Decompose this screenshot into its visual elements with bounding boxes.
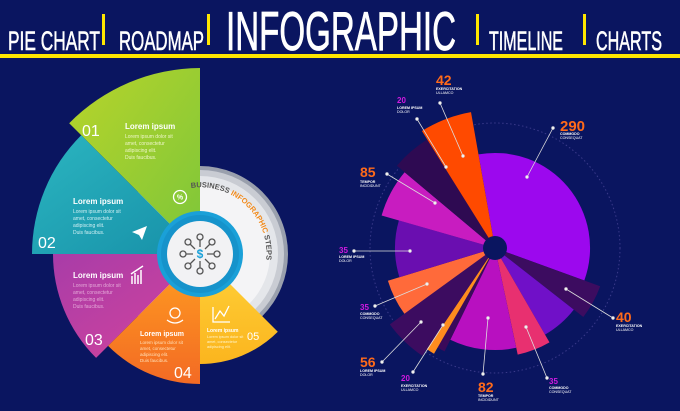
data labels: ULLAMCO	[436, 91, 454, 95]
segment 05 yellow: Lorem ipsum dolor sit	[207, 335, 244, 339]
segment 03 magenta: Lorem ipsum dolor sit	[73, 283, 121, 289]
header label: roadmap: ROADMAP	[119, 26, 204, 56]
data labels	[339, 72, 643, 402]
segment 01 green: Lorem ipsum	[125, 122, 175, 131]
segment 02 teal: 02	[38, 235, 56, 252]
segment 01 green: %	[177, 194, 184, 202]
data labels: 20	[401, 374, 410, 383]
segment 04 orange: amet, consectetur	[140, 346, 176, 351]
segment 01 green: adipiscing elit.	[125, 148, 156, 154]
segment 01 green: 01	[82, 123, 100, 140]
segment 02 teal: Lorem ipsum	[73, 197, 123, 206]
segment 03 magenta: Duis faucibus.	[73, 304, 104, 310]
data labels: COMMODO	[360, 312, 380, 316]
data labels: INCIDIDUNT	[478, 398, 500, 402]
data labels: 56	[360, 354, 376, 370]
data labels: 85	[360, 164, 376, 180]
data labels: 35	[339, 246, 348, 255]
data labels: LOREM IPSUM	[360, 369, 385, 373]
data labels: 42	[436, 72, 452, 88]
data labels: LOREM IPSUM	[339, 255, 364, 259]
left pie chart: business infographic steps	[32, 68, 288, 384]
data labels: 82	[478, 379, 494, 395]
data labels: DOLOR	[397, 110, 410, 114]
segment 04 orange: 04	[174, 365, 192, 382]
segment 05 yellow	[200, 254, 278, 364]
segment 05 yellow: adipiscing elit.	[207, 345, 231, 349]
segment 04 orange: Lorem ipsum	[140, 331, 184, 338]
data labels: COMMODO	[549, 386, 569, 390]
segment 04 orange	[108, 254, 200, 384]
segment 02 teal: amet, consectetur	[73, 216, 113, 222]
data labels: EXERCITATION	[401, 384, 428, 388]
center hub icon	[157, 211, 243, 297]
data labels: 35	[549, 377, 558, 386]
segment 01 green: Lorem ipsum dolor sit	[125, 134, 173, 140]
title: INFOGRAPHIC	[226, 0, 456, 62]
segment 05 yellow: 05	[247, 331, 259, 343]
data labels: CONSEQUAT	[560, 136, 583, 140]
segment 02 teal	[32, 135, 200, 254]
data labels: TEMPOR	[478, 394, 494, 398]
right radial chart	[370, 112, 620, 373]
data labels: 290	[560, 118, 585, 135]
header label: timeline: TIMELINE	[489, 26, 563, 56]
data labels: CONSEQUAT	[360, 316, 383, 320]
data labels: EXERCITATION	[616, 324, 643, 328]
gray rings	[112, 166, 288, 342]
segment 02 teal: adipiscing elit.	[73, 223, 104, 229]
segment 02 teal: Duis faucibus.	[73, 230, 104, 236]
leader lines	[353, 102, 614, 379]
segment 02 teal: Lorem ipsum dolor sit	[73, 209, 121, 215]
segment 03 magenta	[53, 254, 200, 358]
segment 04 orange: adipiscing elit.	[140, 352, 168, 357]
segment 03 magenta: Lorem ipsum	[73, 271, 123, 280]
wedges	[382, 112, 600, 356]
data labels: ULLAMCO	[616, 328, 634, 332]
data labels: CONSEQUAT	[549, 390, 572, 394]
segment 05 yellow: Lorem ipsum	[207, 328, 239, 334]
data labels: 20	[397, 96, 406, 105]
segment 03 magenta: 03	[85, 332, 103, 349]
data labels: TEMPOR	[360, 180, 376, 184]
data labels: COMMODO	[560, 132, 580, 136]
data labels: DOLOR	[360, 373, 373, 377]
data labels: EXERCITATION	[436, 87, 463, 91]
data labels: DOLOR	[339, 259, 352, 263]
data labels: 35	[360, 303, 369, 312]
segment 01 green	[69, 68, 200, 254]
header	[8, 0, 662, 62]
data labels: LOREM IPSUM	[397, 106, 422, 110]
segment 04 orange: Lorem ipsum dolor sit	[140, 340, 184, 345]
center hub icon: $	[197, 247, 204, 261]
segment 04 orange: Duis faucibus.	[140, 358, 168, 363]
segment 03 magenta: amet, consectetur	[73, 290, 113, 296]
segment 05 yellow: amet, consectetur	[207, 340, 238, 344]
data labels: ULLAMCO	[401, 388, 419, 392]
segment 01 green: Duis faucibus.	[125, 155, 156, 161]
data labels: 40	[616, 309, 632, 325]
curved heading: business infographic steps: BUSINESS INFOGRAPHIC STEPS	[191, 182, 272, 260]
data labels: INCIDIDUNT	[360, 184, 382, 188]
header label: pie chart: PIE CHART	[8, 26, 100, 56]
segment 01 green: amet, consectetur	[125, 141, 165, 147]
segment 03 magenta: adipiscing elit.	[73, 297, 104, 303]
